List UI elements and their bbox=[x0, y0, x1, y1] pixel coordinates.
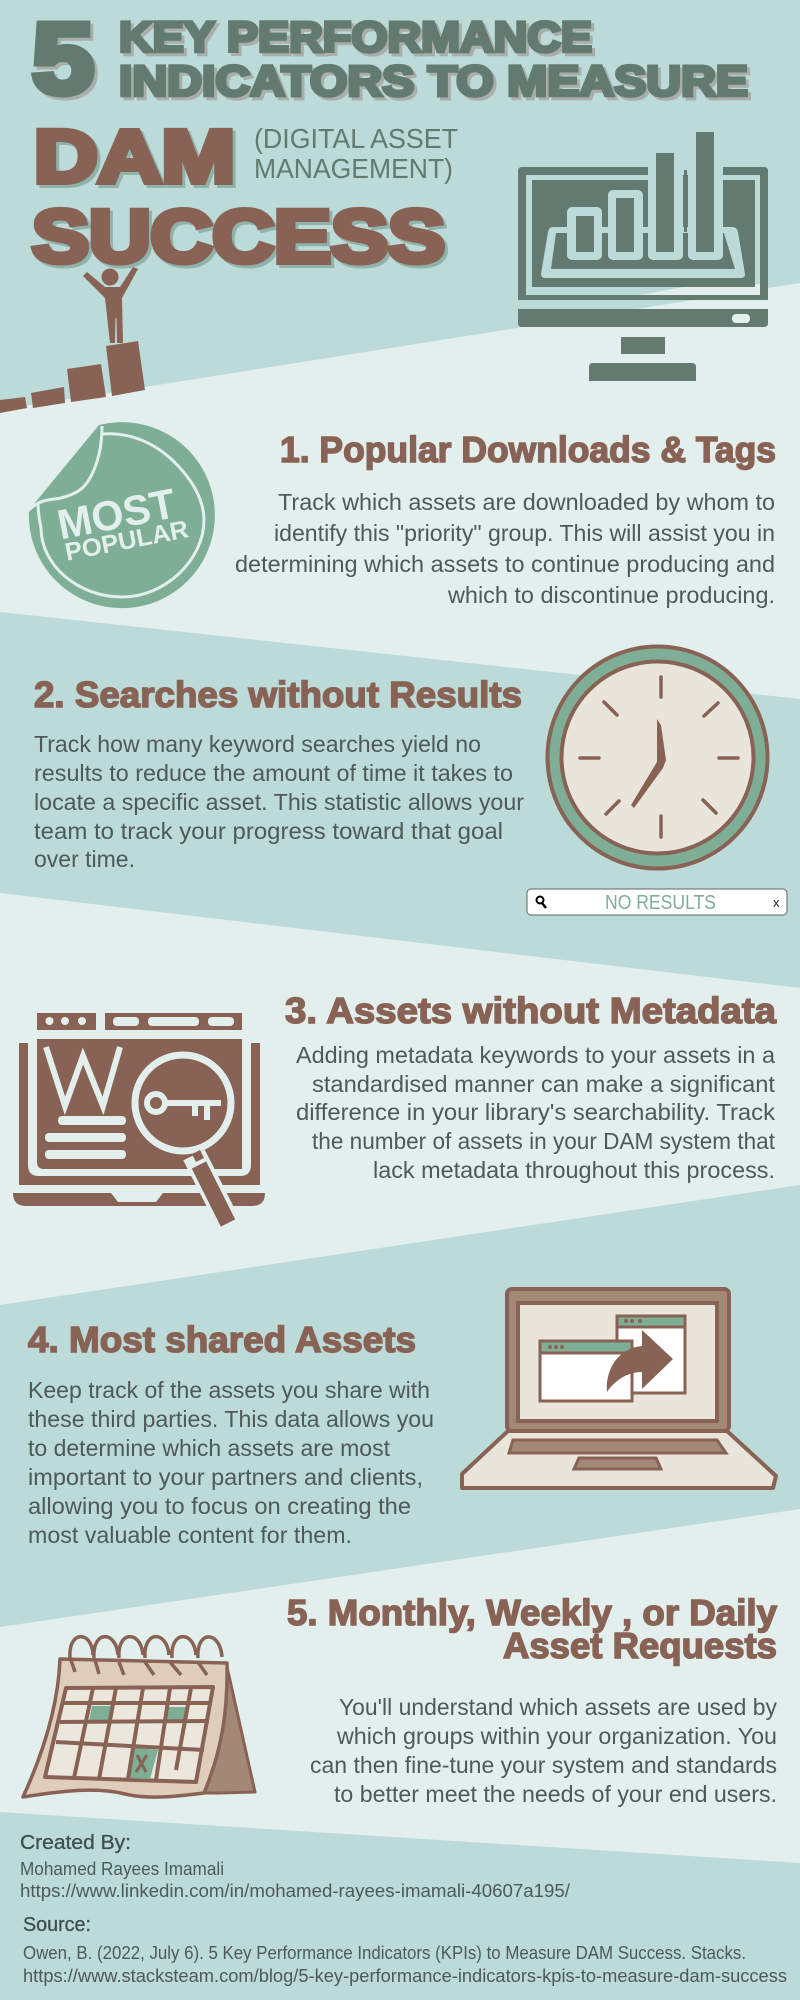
icon: most popular sticker bbox=[28, 422, 215, 608]
credits: created by bbox=[20, 1832, 571, 1901]
credits: source: https://www.stacksteam.com/blog/5-key-performance-indicators-kpis-to-measure-dam-success bbox=[23, 1965, 787, 1986]
title: DAM: DAM bbox=[34, 115, 235, 198]
search box: no results bbox=[527, 889, 787, 915]
title: 5 key performance indicators bbox=[32, 3, 748, 115]
text: asset requests description: to better meet the needs of your end users. bbox=[334, 1781, 777, 1807]
text: popular downloads description: identify this "priority" group. This will assist you in bbox=[274, 520, 775, 546]
text: asset requests description: which groups within your organization. You bbox=[336, 1723, 777, 1749]
heading: popular downloads and tags: 1. Popular Downloads & Tags bbox=[280, 429, 776, 470]
title: SUCCESS: SUCCESS bbox=[32, 195, 445, 278]
title: 5 key performance indicators: 5 bbox=[32, 3, 94, 115]
credits: created by: https://www.linkedin.com/in/mohamed-rayees-imamali-40607a195/ bbox=[20, 1880, 571, 1901]
text: searches description: team to track your progress toward that goal bbox=[34, 818, 503, 844]
text: searches description: over time. bbox=[34, 846, 135, 872]
text: most shared description: these third parties. This data allows you bbox=[28, 1406, 434, 1432]
subtitle: digital asset management bbox=[254, 123, 458, 184]
text: metadata description: lack metadata throughout this process. bbox=[373, 1157, 775, 1183]
text: asset requests description: can then fine-tune your system and standards bbox=[310, 1752, 777, 1778]
credits: source bbox=[23, 1914, 787, 1986]
credits: source: Owen, B. (2022, July 6). 5 Key Performance Indicators (KPIs) to Measure DAM Success. Stacks. bbox=[23, 1942, 746, 1963]
search box: no results: x bbox=[773, 895, 780, 910]
text: popular downloads description: Track which assets are downloaded by whom to bbox=[278, 489, 775, 515]
text: most shared description: important to your partners and clients, bbox=[28, 1464, 423, 1490]
subtitle: digital asset management: MANAGEMENT) bbox=[254, 153, 453, 184]
credits: created by: Mohamed Rayees Imamali bbox=[20, 1858, 224, 1879]
heading: most shared assets: 4. Most shared Assets bbox=[28, 1319, 416, 1360]
heading: assets without metadata: 3. Assets without Metadata bbox=[285, 990, 777, 1031]
icon: most popular sticker: POPULAR bbox=[63, 515, 191, 567]
icon: most popular sticker: MOST bbox=[53, 479, 180, 548]
text: metadata description: standardised manner can make a significant bbox=[312, 1071, 775, 1097]
search box: no results: NO RESULTS bbox=[605, 892, 716, 914]
text: most shared description: Keep track of the assets you share with bbox=[28, 1377, 430, 1403]
text: searches description: Track how many keyword searches yield no bbox=[34, 731, 481, 757]
icon: laptop sharing windows bbox=[462, 1289, 776, 1488]
text: popular downloads description bbox=[235, 489, 775, 608]
text: metadata description: the number of assets in your DAM system that bbox=[312, 1128, 775, 1154]
heading: searches without results: 2. Searches without Results bbox=[34, 674, 522, 715]
text: metadata description bbox=[296, 1042, 776, 1183]
icon: desk calendar bbox=[23, 1637, 255, 1797]
text: most shared description: to determine which assets are most bbox=[28, 1435, 390, 1461]
heading: monthly weekly or daily asset requests: Asset Requests bbox=[503, 1625, 777, 1666]
text: most shared description: allowing you to focus on creating the bbox=[28, 1493, 411, 1519]
text: popular downloads description: which to discontinue producing. bbox=[447, 582, 775, 608]
text: metadata description: difference in your library's searchability. Track bbox=[296, 1099, 775, 1125]
text: searches description: results to reduce the amount of time it takes to bbox=[34, 760, 513, 786]
text: searches description: locate a specific asset. This statistic allows your bbox=[34, 789, 524, 815]
icon: clock bbox=[548, 646, 768, 868]
credits: created by: Created By: bbox=[20, 1832, 131, 1854]
text: most shared description bbox=[28, 1377, 434, 1548]
text: asset requests description: You'll understand which assets are used by bbox=[339, 1694, 777, 1720]
text: searches description bbox=[34, 731, 524, 872]
icon: monitor with bar chart bbox=[518, 132, 768, 381]
title: 5 key performance indicators: KEY PERFORMANCE bbox=[119, 14, 592, 62]
icon: person on rising steps bbox=[0, 267, 145, 413]
heading: monthly weekly or daily asset requests: 5. Monthly, Weekly , or Daily bbox=[287, 1592, 777, 1633]
icon: laptop with magnifier and key bbox=[13, 1013, 265, 1224]
credits: source: Source: bbox=[23, 1914, 91, 1936]
text: asset requests description bbox=[310, 1694, 777, 1807]
text: most shared description: most valuable content for them. bbox=[28, 1522, 352, 1548]
title: 5 key performance indicators: INDICATORS TO MEASURE bbox=[119, 58, 748, 106]
text: metadata description: Adding metadata keywords to your assets in a bbox=[296, 1042, 776, 1068]
subtitle: digital asset management: (DIGITAL ASSET bbox=[254, 123, 458, 154]
text: popular downloads description: determining which assets to continue producing and bbox=[235, 551, 775, 577]
heading: monthly weekly or daily asset requests bbox=[287, 1592, 777, 1666]
